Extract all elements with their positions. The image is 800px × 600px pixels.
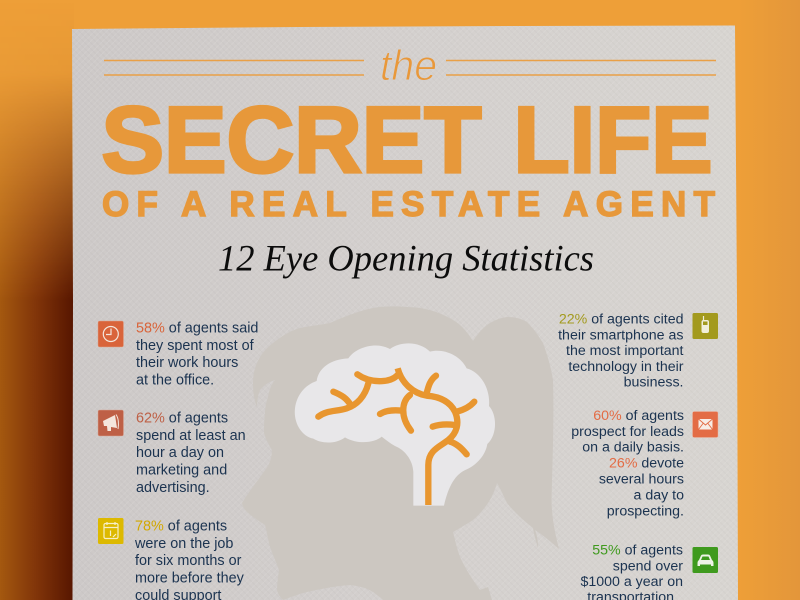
text: 60%: 60% of agents [593, 408, 684, 424]
title rules right [446, 60, 716, 75]
icon: megaphone [98, 410, 124, 436]
text: 62%: 62% of agents [136, 411, 228, 427]
text: 60%: prospecting. [607, 503, 684, 519]
text: 22%: technology in their [568, 359, 684, 375]
word: the: the [380, 42, 437, 90]
stat: 58% at the office [98, 321, 258, 389]
stat: 55% transportation [580, 542, 718, 600]
brain veins [318, 368, 474, 505]
icon: clock [98, 321, 124, 347]
head silhouette [242, 306, 559, 600]
text: 62%: advertising. [136, 480, 210, 496]
text: 60%: prospect for leads [571, 424, 684, 440]
title rules left [104, 60, 364, 75]
text: 60%: several hours [599, 471, 684, 487]
text: 55%: $1000 a year on [580, 574, 683, 590]
icon: calendar [98, 518, 124, 544]
icon: phone [692, 313, 718, 339]
text: 62%: hour a day on [136, 445, 224, 461]
text: 55%: 55% of agents [592, 542, 683, 558]
icon: envelope [692, 412, 718, 438]
stat: 60% and 26% prospecting [571, 408, 718, 519]
stat: 22% smartphone [558, 312, 718, 391]
text: 62%: marketing and [136, 463, 227, 479]
paper sheet [72, 26, 738, 600]
text: 60%: a day to [634, 487, 684, 503]
text: 78%: 78% of agents [135, 519, 227, 535]
text: 78%: for six months or [135, 553, 242, 569]
text: 58%: at the office. [136, 373, 214, 389]
brain outline [295, 343, 495, 506]
heading: life: LIFE [514, 87, 712, 192]
text: 58%: 58% of agents said [136, 321, 258, 337]
text: 22%: business. [624, 375, 684, 391]
text: 60%: 26% devote [609, 456, 684, 472]
heading: secret: SECRET [102, 87, 482, 192]
tagline: 12 Eye Opening Statistics [218, 238, 594, 280]
text: 58%: they spent most of [136, 338, 255, 354]
title block [102, 42, 716, 280]
subheading: OF A REAL ESTATE AGENT [102, 185, 715, 224]
stat: 62% marketing [98, 410, 246, 496]
text: 78%: were on the job [134, 536, 233, 552]
brain [295, 343, 495, 506]
text: 62%: spend at least an [136, 428, 246, 444]
text: 78%: more before they [135, 571, 245, 587]
text: 22%: their smartphone as [558, 328, 684, 344]
text: 22%: 22% of agents cited [559, 312, 684, 328]
text: 60%: on a daily basis. [582, 440, 684, 456]
text: 55%: spend over [613, 558, 683, 574]
icon: car [692, 547, 718, 573]
text: 22%: the most important [566, 343, 684, 359]
stat: 78% six months [98, 518, 245, 600]
text: 58%: their work hours [136, 355, 238, 371]
